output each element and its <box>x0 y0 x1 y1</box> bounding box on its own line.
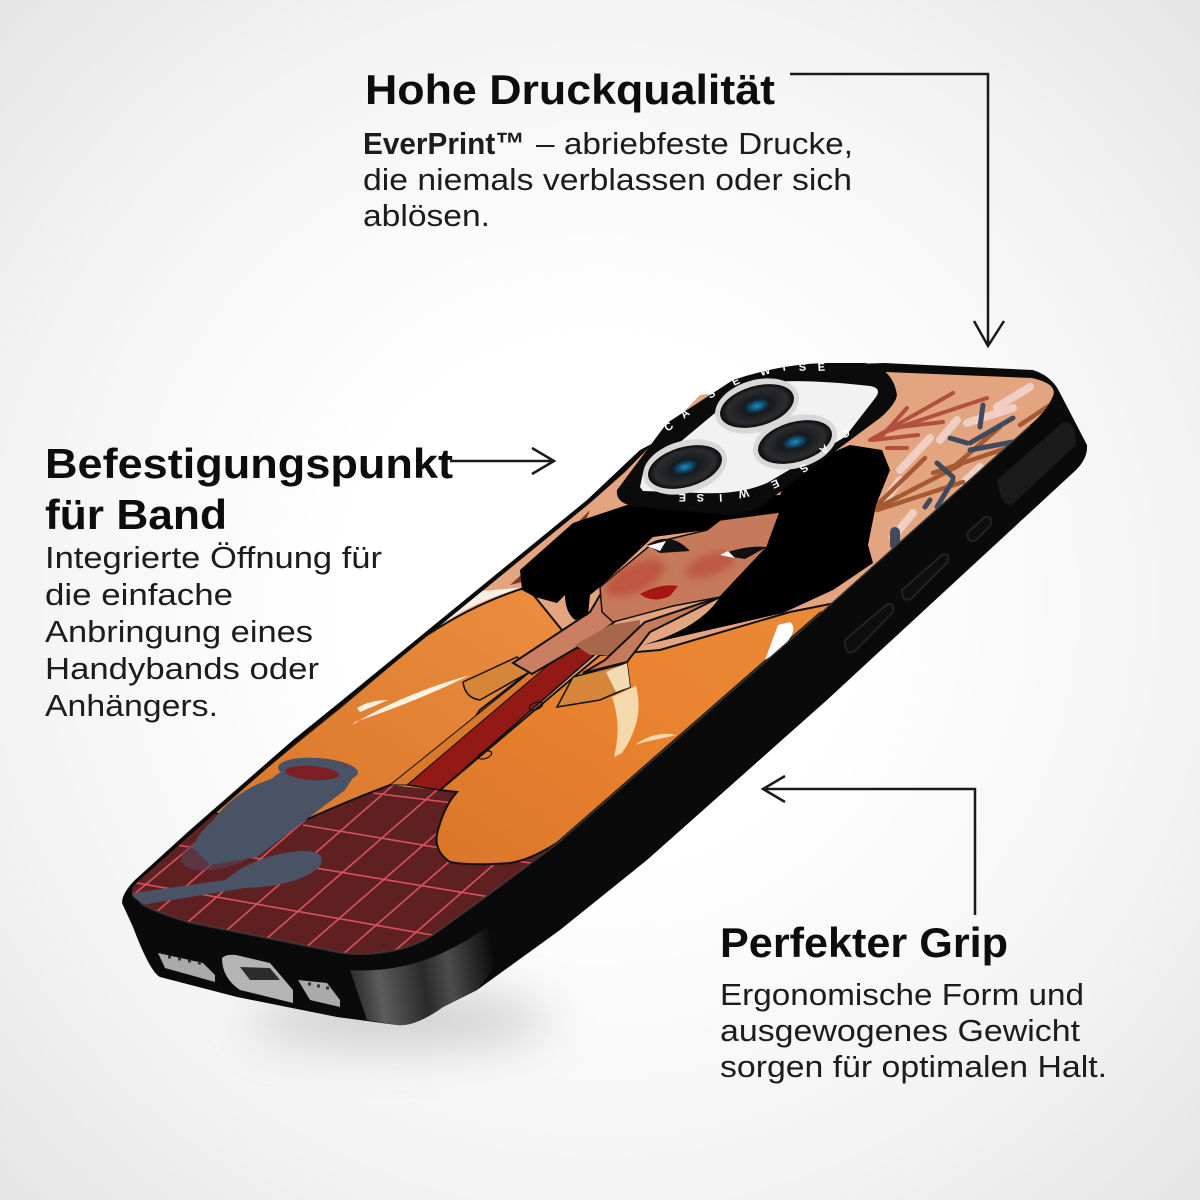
heading: Befestigungspunkt <box>45 440 453 487</box>
jacket placket <box>390 665 549 786</box>
buttons <box>477 700 544 761</box>
heading <box>45 440 453 538</box>
body text: ausgewogenes Gewicht <box>720 1013 1080 1048</box>
heading: Perfekter Grip <box>720 919 1008 966</box>
body text <box>45 540 382 723</box>
white sliver left <box>440 588 522 626</box>
brand text ring top: CASEWISE <box>662 362 826 434</box>
phone shadow <box>250 994 550 1046</box>
side buttons <box>845 517 991 652</box>
camera bump <box>617 363 897 515</box>
brand text ring bottom: CASEWISE <box>679 426 852 503</box>
body text: ablösen. <box>363 198 490 233</box>
body text: Handybands oder <box>45 651 319 686</box>
heading: Hohe Druckqualität <box>365 66 775 113</box>
collar and shoulder <box>612 686 677 757</box>
blue leaves <box>895 405 1013 545</box>
lens top <box>708 369 806 443</box>
eyes <box>647 539 767 559</box>
body text: Integrierte Öffnung für <box>45 540 382 575</box>
body text: Anbringung eines <box>45 614 313 649</box>
body text: EverPrint™ <box>363 126 525 161</box>
printed artwork <box>132 372 1054 954</box>
case body <box>122 363 1087 1025</box>
arrow: strap attachment <box>450 448 554 474</box>
arrow: print quality <box>790 74 1004 346</box>
body text: Ergonomische Form und <box>720 977 1084 1012</box>
cuffs <box>463 657 630 707</box>
camera glass <box>640 381 878 493</box>
glossy corner <box>350 927 500 1025</box>
spoon <box>133 851 322 906</box>
jacket left sleeve <box>213 587 570 830</box>
body text: die niemals verblassen oder sich <box>363 162 852 197</box>
pale leaves <box>885 387 1030 537</box>
camera module <box>617 362 897 515</box>
table grid <box>132 786 531 953</box>
sleeve highlight <box>352 675 470 725</box>
rim highlight <box>140 425 1030 954</box>
lens left <box>636 430 734 504</box>
body text <box>720 977 1107 1084</box>
hands and neck <box>513 590 720 674</box>
art base <box>132 372 1054 954</box>
callout: print quality <box>363 66 853 233</box>
speaker right <box>298 980 340 1007</box>
shirt stripe <box>407 647 600 790</box>
body text: sorgen für optimalen Halt. <box>720 1049 1107 1084</box>
usb port <box>222 955 293 1003</box>
callout: grip <box>720 919 1107 1084</box>
body text: Anhängers. <box>45 688 218 723</box>
arrow: grip <box>763 776 975 915</box>
hair <box>520 445 890 645</box>
callout: strap attachment <box>45 440 453 723</box>
jacket torso <box>436 600 850 864</box>
mug <box>181 758 358 870</box>
body text: – abriebfeste Drucke, <box>536 126 853 161</box>
face <box>600 512 780 622</box>
speaker left <box>158 953 215 982</box>
red leaves <box>870 393 987 448</box>
lens right <box>746 405 844 479</box>
body text <box>363 126 853 233</box>
strap slot <box>997 422 1076 505</box>
heading: für Band <box>45 491 227 538</box>
left dark foliage <box>510 510 590 585</box>
brown leaves <box>877 405 1050 510</box>
table <box>132 786 553 954</box>
body text: die einfache <box>45 577 233 612</box>
phone case <box>122 363 1087 1025</box>
plants <box>870 387 1050 545</box>
